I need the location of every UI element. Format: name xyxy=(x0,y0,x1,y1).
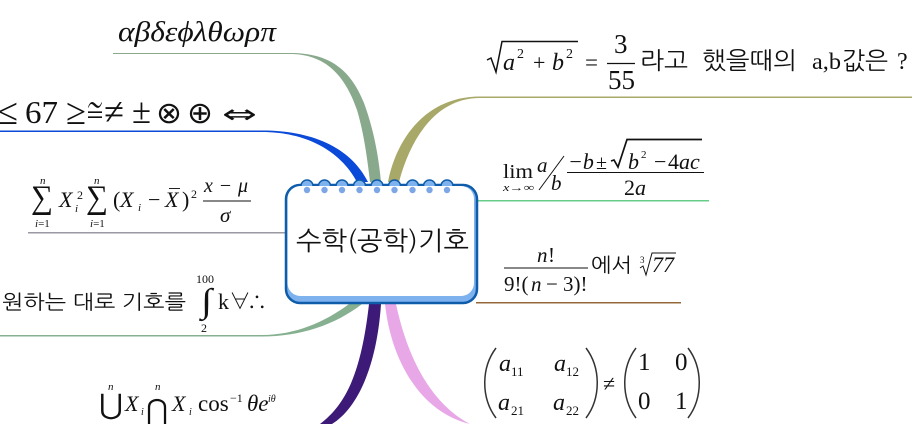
limit formula: x→∞ xyxy=(502,182,534,194)
union intersection formula: X xyxy=(171,391,187,416)
square root equation: a,b xyxy=(812,49,841,74)
factorial formula xyxy=(504,243,676,296)
branch: integral xyxy=(0,304,362,336)
limit formula: b xyxy=(628,149,639,174)
union intersection formula: −1 xyxy=(230,391,243,405)
factorial formula: 77 xyxy=(652,252,675,277)
relation symbols: ≅ xyxy=(85,92,105,133)
relation symbols: ≠ xyxy=(104,92,124,133)
union intersection formula: ⋃ xyxy=(99,388,123,421)
factorial formula: ! xyxy=(548,243,555,267)
relation symbols: 67 xyxy=(25,94,58,130)
limit formula: b xyxy=(551,171,562,195)
matrix formula: 1 xyxy=(638,349,650,376)
matrix formula xyxy=(485,348,699,418)
summation formula: ∑ xyxy=(86,180,108,216)
summation formula: X xyxy=(58,187,74,212)
matrix formula: 11 xyxy=(511,364,524,379)
integral text: k∀ xyxy=(218,289,251,314)
union intersection formula: θe xyxy=(247,391,269,416)
square root equation: 2 xyxy=(517,47,524,62)
relation symbols: ⊗ xyxy=(156,96,182,131)
summation formula: 2 xyxy=(191,187,197,201)
limit formula: ± xyxy=(596,152,607,174)
square root equation: 3 xyxy=(614,29,628,59)
square root equation: 2 xyxy=(566,47,573,62)
factorial formula: 3)! xyxy=(563,272,588,296)
factorial formula: 9!( xyxy=(504,272,528,296)
square root equation: + xyxy=(533,50,545,75)
summation formula: X xyxy=(119,187,135,212)
limit formula: 2 xyxy=(641,149,646,161)
square root equation: a xyxy=(503,50,515,76)
limit formula: − xyxy=(654,149,666,174)
summation formula: i xyxy=(138,202,141,214)
union intersection formula xyxy=(99,381,276,424)
summation formula: ) xyxy=(182,187,189,212)
branch: summation xyxy=(28,232,285,234)
factorial formula: n xyxy=(537,243,548,267)
limit formula: 2 xyxy=(624,175,635,200)
relation symbols xyxy=(0,91,257,133)
summation formula: i=1 xyxy=(90,218,105,230)
summation formula: ( xyxy=(113,187,120,212)
factorial formula: 3 xyxy=(640,255,645,265)
summation formula: 2 xyxy=(77,188,83,202)
integral text: 100 xyxy=(196,272,214,286)
matrix formula: a xyxy=(499,351,511,377)
matrix formula: 1 xyxy=(675,388,688,415)
summation formula: − xyxy=(148,187,160,212)
relation symbols: ⊕ xyxy=(187,96,213,131)
summation formula: i=1 xyxy=(35,218,50,230)
limit formula xyxy=(502,140,704,200)
integral text: 2 xyxy=(201,321,207,335)
limit formula: ac xyxy=(679,149,700,174)
union intersection formula: n xyxy=(108,381,114,393)
matrix formula: 12 xyxy=(566,364,579,379)
matrix formula: 21 xyxy=(511,403,524,418)
summation formula: n xyxy=(94,175,100,187)
matrix formula: a xyxy=(554,351,566,377)
square root equation: 55 xyxy=(608,65,635,95)
factorial formula: 에서 xyxy=(591,255,632,275)
union intersection formula: X xyxy=(124,391,140,416)
square root equation: = xyxy=(585,50,598,75)
limit formula: a xyxy=(537,153,548,177)
branch: matrix xyxy=(385,304,470,424)
union intersection formula: i xyxy=(189,407,192,418)
limit formula: −b xyxy=(568,149,594,174)
matrix formula: ≠ xyxy=(603,371,615,396)
limit formula: 4 xyxy=(668,149,679,174)
central topic title: 수학(공학)기호 xyxy=(296,228,469,254)
union intersection formula: cos xyxy=(198,391,229,416)
integral text: ∫ xyxy=(199,283,215,322)
branch: square root question xyxy=(388,96,912,182)
matrix formula: 0 xyxy=(638,388,650,415)
summation formula: σ xyxy=(220,203,232,227)
square root equation: ? xyxy=(897,49,908,75)
relation symbols: ± xyxy=(132,91,151,131)
summation formula: n xyxy=(40,175,46,187)
integral text: ∴ xyxy=(247,292,267,314)
square root equation: 값은 xyxy=(842,49,888,73)
summation formula: i xyxy=(75,203,78,215)
central topic notebook xyxy=(286,180,477,303)
integral text: 원하는 대로 기호를 xyxy=(2,292,186,312)
union intersection formula: n xyxy=(155,381,161,393)
branch: greek letters xyxy=(113,53,381,182)
matrix formula: a xyxy=(553,390,565,416)
branch: factorial xyxy=(476,302,681,304)
relation symbols: ⇔ xyxy=(222,100,257,130)
branch: union intersection xyxy=(320,304,381,424)
branch: limit xyxy=(478,200,709,202)
factorial formula: − xyxy=(546,272,558,296)
square root equation xyxy=(487,29,908,95)
greek letters: αβδεϕλθωρπ xyxy=(118,17,277,48)
limit formula: a xyxy=(635,175,646,200)
square root equation: 했을때의 xyxy=(702,48,797,73)
factorial formula: n xyxy=(531,272,542,296)
summation formula: X xyxy=(164,187,180,212)
notebook rings xyxy=(301,180,453,186)
summation formula xyxy=(31,175,251,230)
matrix formula: 22 xyxy=(566,403,579,418)
relation symbols: ≥ xyxy=(66,92,86,133)
integral text xyxy=(2,272,267,335)
union intersection formula: i xyxy=(141,407,144,418)
union intersection formula: iθ xyxy=(268,394,276,405)
branch: relations xyxy=(0,130,368,182)
limit formula: lim xyxy=(503,161,533,183)
square root equation: 라고 xyxy=(640,49,688,73)
square root equation: b xyxy=(552,50,564,76)
matrix formula: a xyxy=(498,390,510,416)
matrix formula: 0 xyxy=(675,349,688,376)
summation formula: ∑ xyxy=(31,180,53,216)
summation formula: x − μ xyxy=(203,175,248,197)
